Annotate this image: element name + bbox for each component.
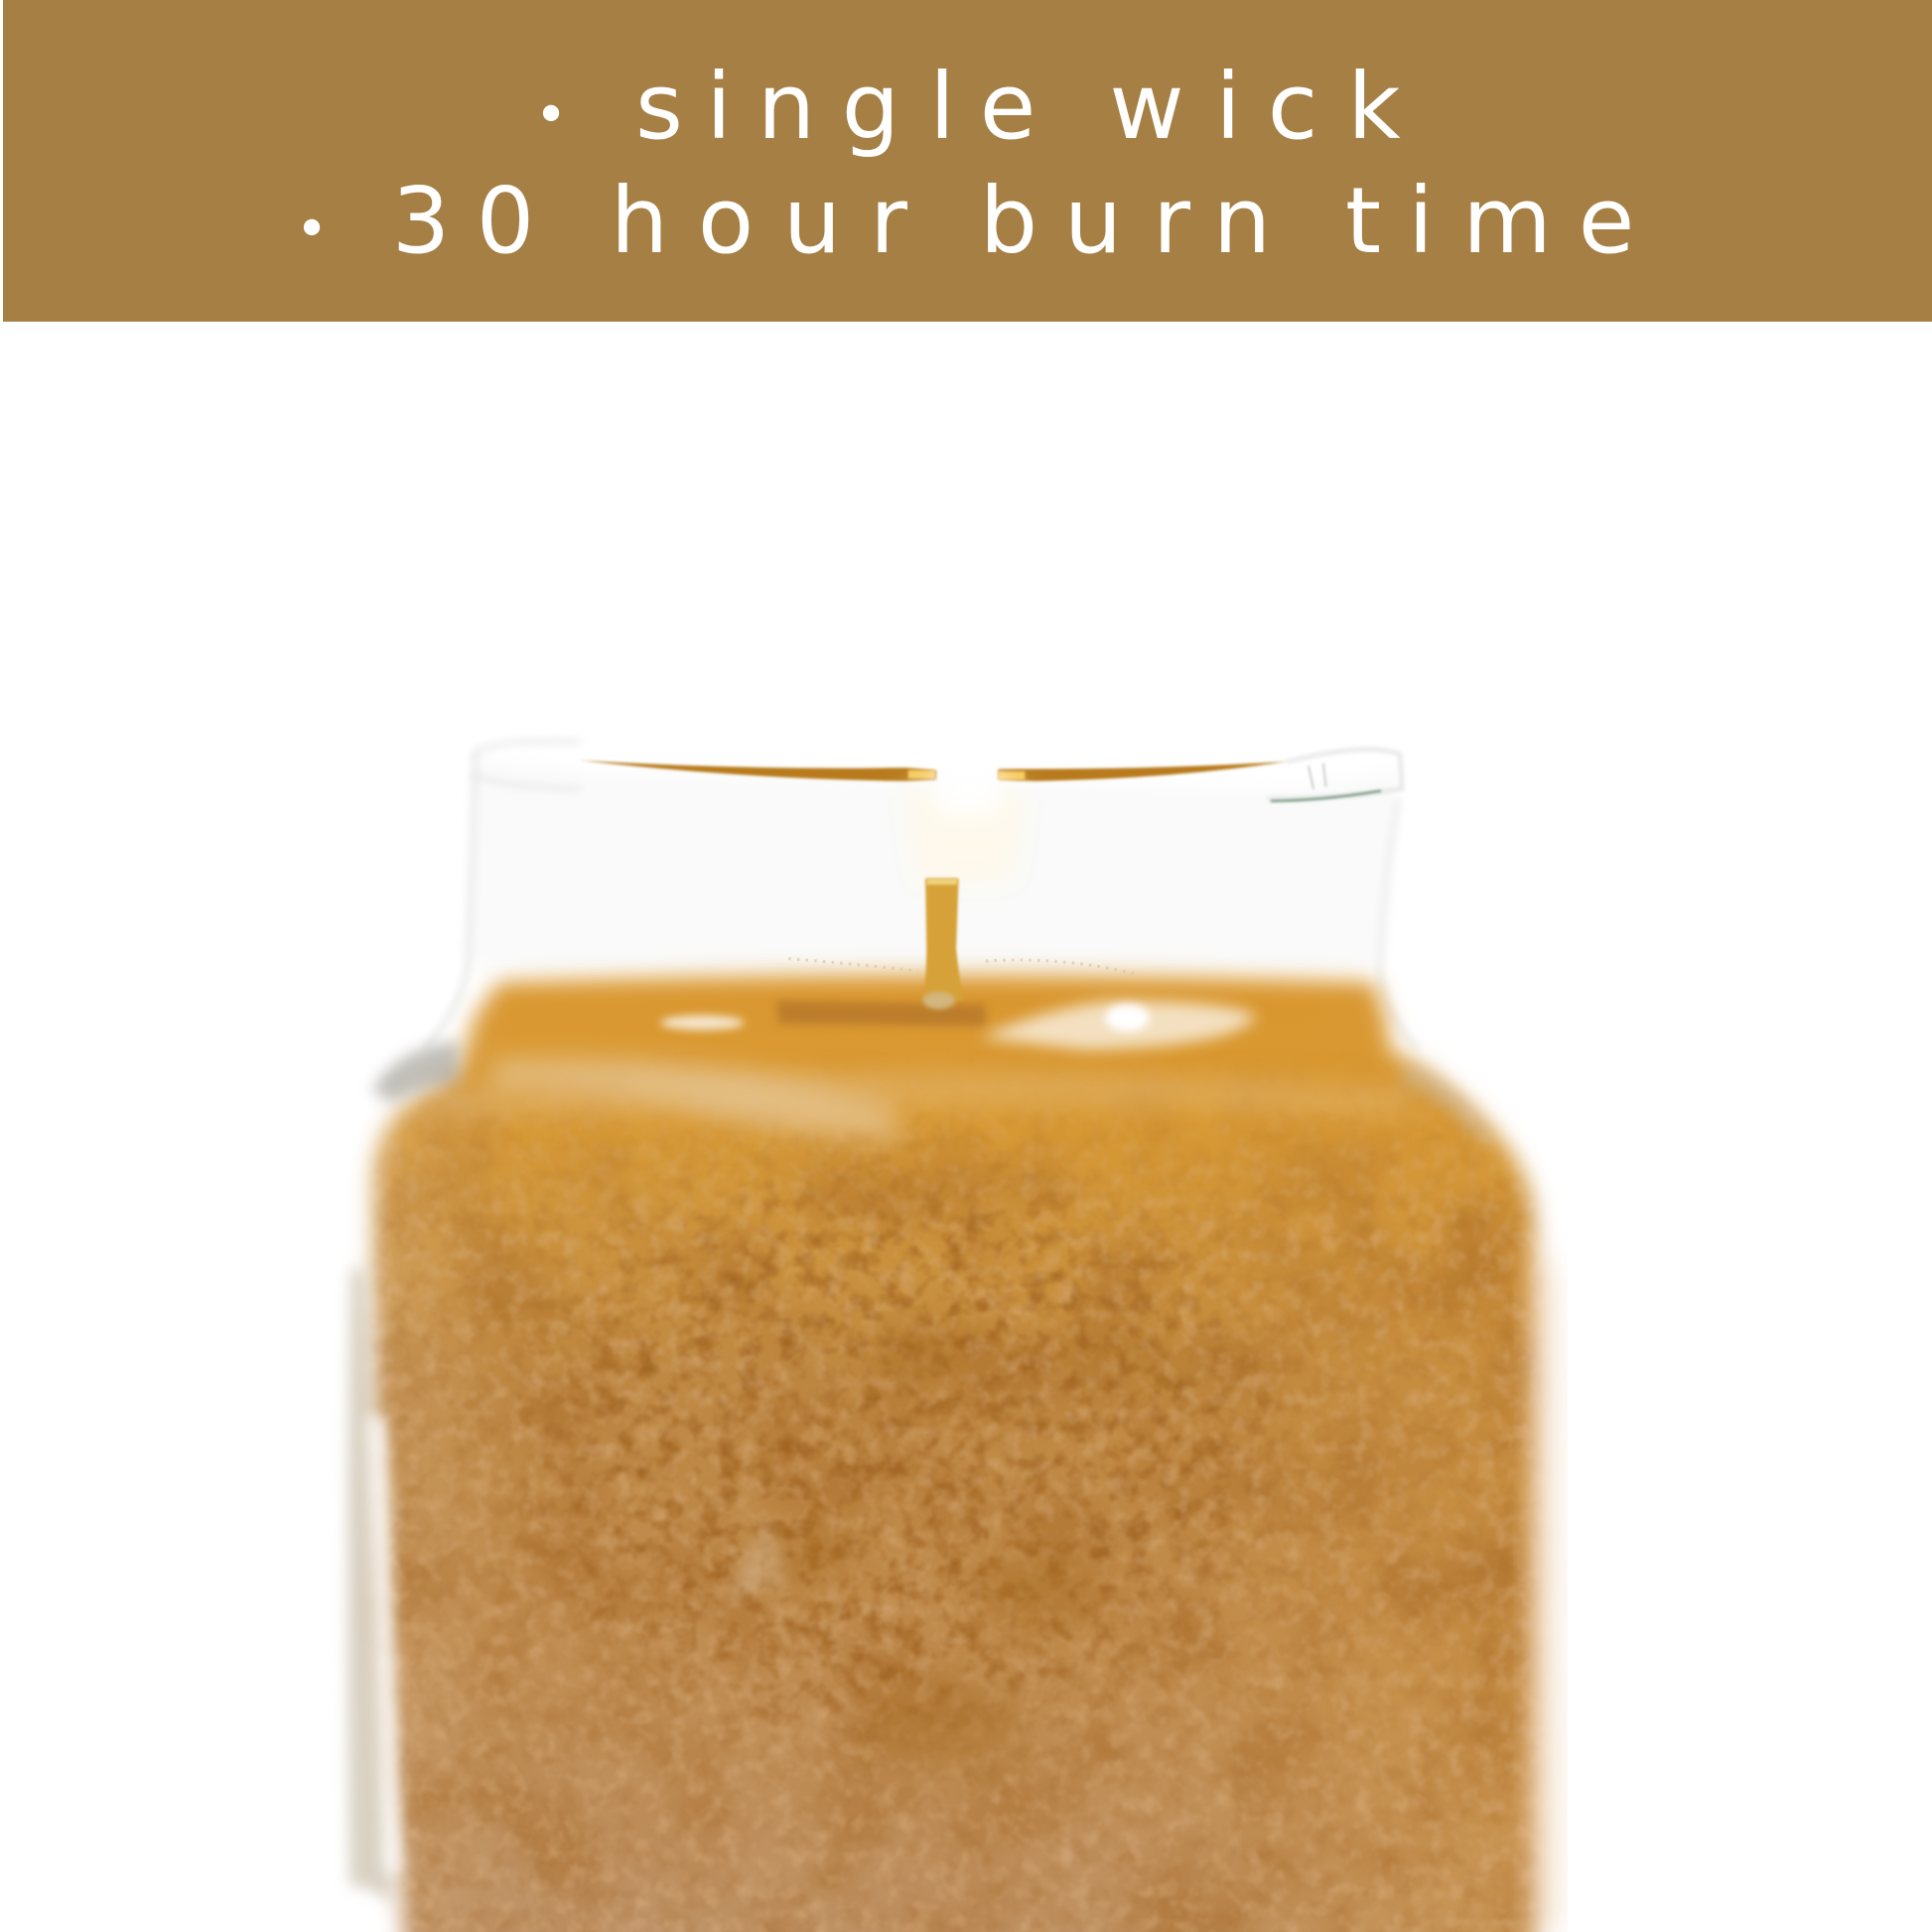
left shoulder glass shadow (372, 1041, 459, 1103)
surface highlight right (980, 1001, 1257, 1049)
broad tonal blotches (383, 1112, 1529, 1932)
shoulder pale band (425, 1072, 1417, 1121)
surface highlight left (660, 1016, 745, 1031)
left glass white gap (367, 1417, 402, 1872)
dark spots (752, 1328, 1171, 1768)
banner text: single wick: single wick (591, 54, 1401, 160)
right glow edge (1528, 1232, 1553, 1932)
banner text: single wick: • (534, 83, 568, 148)
rim amber reflection right (998, 761, 1288, 781)
pale streak on left shoulder (492, 1057, 905, 1140)
left glass edge reflection (347, 1269, 392, 1903)
flame glow (905, 770, 1026, 881)
glass jar interior and outline (425, 742, 1417, 1047)
foam specks at wax top (788, 959, 1134, 973)
right shoulder glass shadow (1399, 1059, 1497, 1146)
wick (923, 879, 964, 1009)
banner text: 30 hour burn time: 30 hour burn time (352, 168, 1634, 274)
rim flame sparks (908, 770, 1026, 780)
rim amber reflection left (579, 760, 936, 781)
wax body (345, 949, 1578, 1932)
pale lower patch (727, 1525, 781, 1608)
central dark mottling (561, 1198, 1251, 1722)
fine wax grain (374, 1112, 1538, 1932)
candle jar photo illustration (345, 742, 1578, 1932)
header banner (3, 0, 1932, 322)
melt pool (776, 1001, 986, 1027)
banner text: 30 hour burn time: • (295, 198, 329, 262)
